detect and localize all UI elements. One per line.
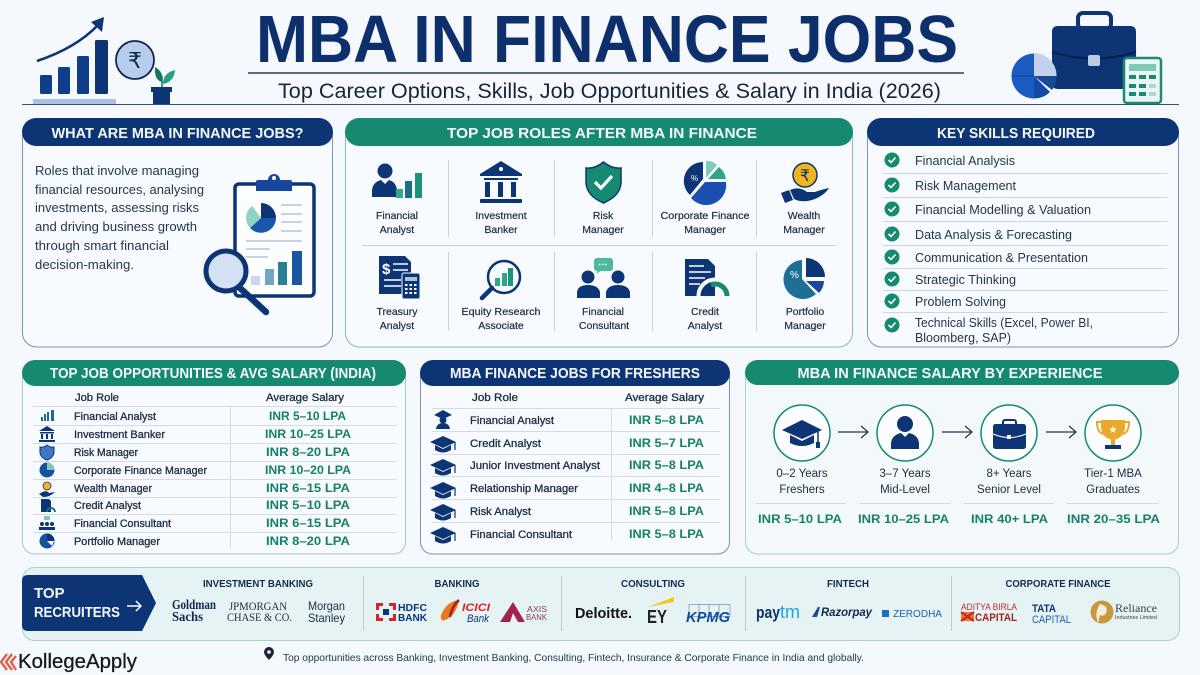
text block: definition: through smart financial: [35, 238, 169, 253]
recruiter group: banking: Bank: [467, 613, 489, 625]
stage: tier-1 graduates: ★: [1109, 425, 1118, 436]
subtitle: Top Career Options, Skills, Job Opportunities & Salary in India (2026): [278, 80, 941, 103]
freshers rows: INR 5–8 LPA: [629, 460, 704, 472]
role: credit analyst: Analyst: [688, 320, 722, 332]
list: skills: Bloomberg, SAP): [915, 331, 1011, 345]
recruiter group: corporate finance: Industries Limited: [1115, 615, 1157, 621]
recruiter group: consulting: Deloitte.: [575, 605, 632, 622]
heading: top job roles: TOP JOB ROLES AFTER MBA IN FINANCE: [447, 125, 757, 142]
stage: tier-1 graduates: Graduates: [1086, 484, 1140, 496]
stage: tier-1 graduates: Tier-1 MBA: [1084, 468, 1142, 480]
freshers rows: INR 4–8 LPA: [629, 483, 704, 495]
text block: definition: financial resources, analysing: [35, 182, 204, 197]
stage: tier-1 graduates: INR 20–35 LPA: [1067, 514, 1160, 526]
recruiter group: investment banking: INVESTMENT BANKING: [203, 578, 313, 590]
panel: MBA finance jobs for freshers: [420, 360, 730, 554]
table rows: roles and salaries: Portfolio Manager: [74, 536, 160, 548]
list: skills: Financial Analysis: [915, 154, 1015, 168]
arrow: [838, 426, 868, 438]
heading: key skills: KEY SKILLS REQUIRED: [937, 125, 1095, 142]
icon: briefcase, pie and calculator: [1012, 13, 1161, 103]
recruiter group: investment banking: [172, 578, 345, 625]
freshers rows: Junior Investment Analyst: [470, 460, 600, 472]
recruiter group: consulting: [575, 578, 730, 627]
role: financial analyst: Financial: [376, 210, 418, 222]
role: treasury analyst: [376, 256, 420, 332]
table rows: roles and salaries: Investment Banker: [74, 429, 165, 441]
recruiter group: investment banking: Stanley: [308, 611, 345, 625]
role: portfolio manager: %: [790, 270, 799, 281]
role: treasury analyst: $: [382, 261, 391, 278]
heading: salary by experience: [745, 360, 1179, 385]
table rows: roles and salaries: INR 5–10 LPA: [266, 500, 350, 512]
recruiter group: corporate finance: CAPITAL: [1032, 614, 1071, 626]
role: financial consultant: Financial: [582, 306, 624, 318]
role: treasury analyst: Treasury: [376, 306, 418, 318]
freshers rows: [470, 415, 704, 541]
stage: mid-level: Mid-Level: [880, 484, 930, 496]
table rows: roles and salaries: Corporate Finance Manager: [74, 465, 207, 477]
role: portfolio manager: Manager: [784, 320, 826, 332]
role: corporate finance manager: %: [691, 174, 698, 183]
role: financial analyst: Analyst: [380, 224, 414, 236]
footer note with pin: [264, 647, 864, 664]
recruiter group: corporate finance: ADITYA BIRLA: [961, 602, 1018, 613]
table row icons: [39, 410, 55, 548]
table rows: roles and salaries: INR 8–20 LPA: [266, 536, 350, 548]
list: skills: Risk Management: [915, 179, 1017, 193]
table rows: roles and salaries: Financial Analyst: [74, 411, 156, 423]
recruiter group: banking: BANKING: [434, 578, 480, 590]
recruiter group: corporate finance: Reliance: [1115, 601, 1157, 615]
recruiter group: fintech: pay: [756, 603, 780, 622]
arrow: [942, 426, 972, 438]
badge: top recruiters: [22, 575, 156, 631]
role: corporate finance manager: Corporate Finance: [660, 210, 750, 222]
freshers rows: INR 5–8 LPA: [629, 415, 704, 427]
freshers column headers: Average Salary: [625, 392, 705, 404]
recruiter group: fintech: [756, 578, 942, 622]
recruiter group: banking: HDFC: [398, 603, 427, 614]
recruiter group: corporate finance: [961, 578, 1157, 626]
freshers rows: Relationship Manager: [470, 483, 578, 495]
stage: mid-level: [858, 405, 949, 526]
list: skills: Problem Solving: [915, 295, 1006, 309]
logo: KollegeApply: KollegeApply: [18, 650, 138, 673]
recruiter group: consulting: CONSULTING: [621, 578, 685, 590]
role: risk manager: [582, 162, 624, 236]
heading: top job roles: [345, 118, 853, 146]
role: financial analyst: [372, 164, 422, 236]
table rows: roles and salaries: Wealth Manager: [74, 483, 152, 495]
list: skills: [884, 152, 1093, 345]
icon: growth chart with rupee and plant: ₹: [128, 48, 142, 73]
role: credit analyst: [685, 259, 729, 332]
role: risk manager: Manager: [582, 224, 624, 236]
role: treasury analyst: Analyst: [380, 320, 414, 332]
recruiter group: investment banking: Sachs: [172, 610, 203, 625]
recruiter group: fintech: Razorpay: [821, 607, 873, 619]
heading: salary by experience: MBA IN FINANCE SALARY BY EXPERIENCE: [798, 365, 1102, 382]
recruiter group: banking: AXIS: [527, 604, 547, 614]
recruiter group: fintech: FINTECH: [827, 578, 869, 590]
freshers row icons: graduation caps: [430, 410, 456, 544]
list: skills: Strategic Thinking: [915, 273, 1016, 287]
text block: definition: [35, 163, 204, 272]
stage: senior level: INR 40+ LPA: [971, 514, 1048, 526]
table rows: roles and salaries: INR 5–10 LPA: [269, 411, 346, 423]
stage: freshers: INR 5–10 LPA: [758, 514, 842, 526]
role: wealth manager: Wealth: [788, 210, 820, 222]
recruiter group: corporate finance: TATA: [1032, 603, 1056, 615]
icon: clipboard with magnifier: [206, 174, 314, 312]
stage: freshers: 0–2 Years: [776, 468, 828, 480]
table rows: roles and salaries: Risk Manager: [74, 447, 138, 459]
panel: salary by experience: [745, 360, 1179, 554]
table rows: roles and salaries: Credit Analyst: [74, 500, 141, 512]
role: investment banker: Investment: [475, 210, 527, 222]
freshers rows: Risk Analyst: [470, 506, 531, 518]
role: wealth manager: Manager: [783, 224, 825, 236]
stage: mid-level: INR 10–25 LPA: [858, 514, 949, 526]
freshers rows: Credit Analyst: [470, 438, 541, 450]
role: risk manager: Risk: [593, 210, 614, 222]
list: skills: Communication & Presentation: [915, 251, 1088, 265]
recruiter group: consulting: EY: [647, 607, 667, 627]
recruiter group: fintech: tm: [780, 602, 800, 622]
stage: freshers: Freshers: [779, 484, 825, 496]
arrow: [1046, 426, 1076, 438]
recruiter group: investment banking: Goldman: [172, 598, 216, 613]
freshers column headers: [472, 392, 705, 404]
heading: what are: [22, 118, 333, 146]
role: equity research associate: Equity Research: [462, 306, 541, 318]
table rows: roles and salaries: INR 10–25 LPA: [265, 429, 351, 441]
title: MBA IN FINANCE JOBS: [256, 2, 958, 77]
stage: mid-level: 3–7 Years: [879, 468, 931, 480]
text block: definition: and driving business growth: [35, 219, 197, 234]
recruiter group: investment banking: JPMORGAN: [229, 599, 287, 613]
table rows: roles and salaries: INR 6–15 LPA: [266, 518, 350, 530]
table rows: roles and salaries: INR 6–15 LPA: [266, 483, 350, 495]
stage: senior level: Senior Level: [977, 484, 1041, 496]
recruiter group: banking: ICICI: [462, 602, 491, 614]
recruiter group: corporate finance: CAPITAL: [975, 612, 1017, 624]
panel: top recruiters: [22, 568, 1180, 640]
role: financial consultant: [577, 258, 630, 332]
panel: top job roles: [345, 118, 853, 347]
text block: definition: Roles that involve managing: [35, 163, 199, 178]
heading: freshers: [420, 360, 730, 386]
badge: top recruiters: RECRUITERS: [34, 605, 120, 621]
list: skills: Data Analysis & Forecasting: [915, 228, 1072, 242]
text block: definition: decision-making.: [35, 257, 134, 272]
recruiter group: banking: BANK: [398, 613, 428, 624]
heading: job opportunities: [22, 360, 406, 386]
role: portfolio manager: [783, 258, 826, 332]
role: credit analyst: Credit: [691, 306, 719, 318]
heading: freshers: MBA FINANCE JOBS FOR FRESHERS: [450, 365, 700, 382]
list: skills: Financial Modelling & Valuation: [915, 203, 1091, 217]
heading: what are: WHAT ARE MBA IN FINANCE JOBS?: [52, 125, 304, 142]
table rows: roles and salaries: Financial Consultant: [74, 518, 171, 530]
stage: senior level: 8+ Years: [986, 468, 1032, 480]
role: equity research associate: [462, 261, 541, 332]
role: equity research associate: Associate: [478, 320, 524, 332]
text block: definition: investments, assessing risks: [35, 200, 199, 215]
freshers column headers: Job Role: [472, 392, 518, 404]
table column headers: Job Role: [75, 392, 119, 404]
recruiter group: consulting: KPMG: [686, 609, 730, 626]
role: corporate finance manager: [660, 161, 750, 236]
recruiter group: investment banking: Morgan: [308, 599, 345, 613]
recruiter group: investment banking: CHASE & CO.: [227, 610, 292, 624]
table column headers: [75, 392, 345, 404]
recruiter group: banking: [376, 578, 548, 625]
role: corporate finance manager: Manager: [684, 224, 726, 236]
recruiter group: corporate finance: CORPORATE FINANCE: [1006, 578, 1110, 590]
freshers rows: Financial Consultant: [470, 529, 572, 541]
role: investment banker: [475, 161, 527, 236]
heading: key skills: [867, 118, 1179, 146]
role: portfolio manager: Portfolio: [786, 306, 824, 318]
freshers rows: INR 5–8 LPA: [629, 506, 704, 518]
role: financial consultant: Consultant: [579, 320, 629, 332]
role: investment banker: Banker: [484, 224, 518, 236]
table column headers: Average Salary: [266, 392, 345, 404]
list: skills: Technical Skills (Excel, Power BI,: [915, 316, 1093, 330]
table rows: roles and salaries: INR 8–20 LPA: [266, 447, 350, 459]
stage: freshers: [758, 405, 842, 526]
table rows: roles and salaries: [74, 411, 351, 548]
table rows: roles and salaries: INR 10–20 LPA: [265, 465, 351, 477]
panel: what are MBA in finance jobs: [22, 118, 333, 347]
recruiter group: fintech: ZERODHA: [893, 609, 942, 620]
role: wealth manager: [781, 163, 829, 236]
freshers rows: Financial Analyst: [470, 415, 554, 427]
panel: top job opportunities table: [22, 360, 406, 554]
footer note with pin: Top opportunities across Banking, Investment Banking, Consulting, Fintech, Insurance & Corporate Finance in India and globally.: [283, 652, 864, 664]
panel: key skills: [867, 118, 1179, 347]
icon: growth chart with rupee and plant: [33, 17, 175, 104]
freshers rows: INR 5–7 LPA: [629, 438, 704, 450]
recruiter group: banking: BANK: [526, 613, 548, 622]
stage: tier-1 graduates: [1067, 405, 1160, 526]
badge: top recruiters: TOP: [34, 585, 65, 602]
role: wealth manager: ₹: [800, 168, 810, 185]
freshers rows: INR 5–8 LPA: [629, 529, 704, 541]
stage: senior level: [971, 405, 1048, 526]
heading: job opportunities: TOP JOB OPPORTUNITIES & AVG SALARY (INDIA): [50, 365, 376, 382]
